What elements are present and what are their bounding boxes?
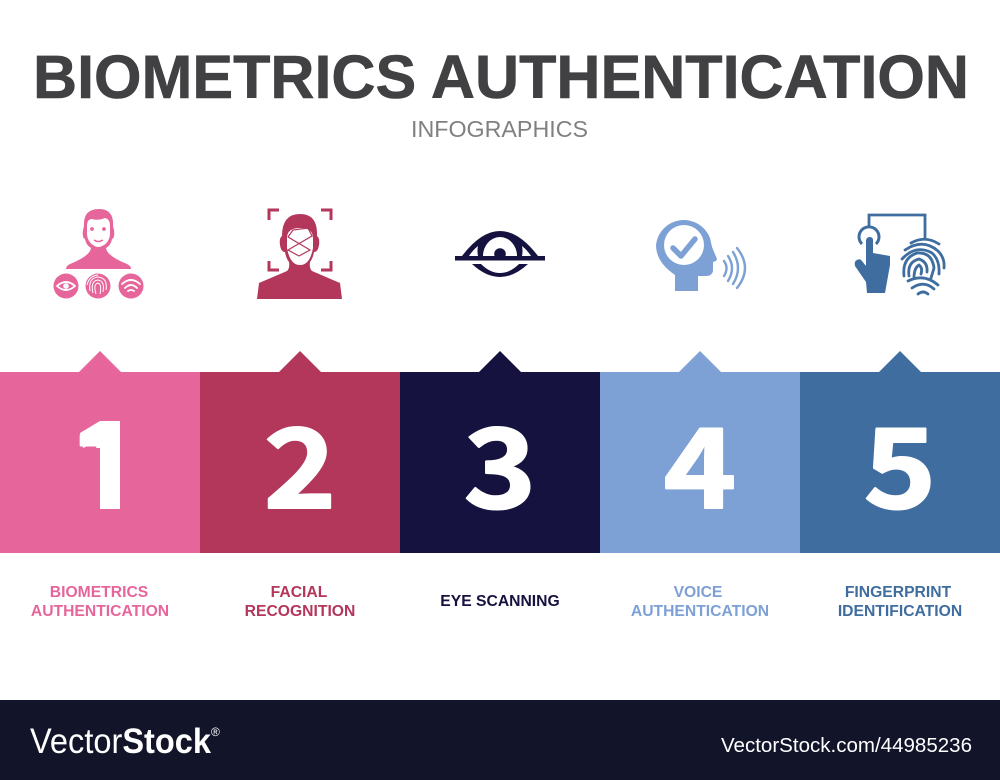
step 1 panel xyxy=(0,351,200,553)
step 2 panel: 2 xyxy=(264,381,336,540)
label 2: RECOGNITION xyxy=(245,603,355,620)
subtitle: INFOGRAPHICS xyxy=(411,116,588,142)
footer bar xyxy=(0,700,1000,780)
step 2 panel xyxy=(200,351,400,553)
icon: biometrics person xyxy=(54,209,144,298)
label 2: FACIAL xyxy=(271,584,328,601)
icon: facial recognition xyxy=(257,210,342,299)
icon: voice authentication xyxy=(656,220,745,291)
label 4: VOICE xyxy=(674,584,722,601)
step 5 panel xyxy=(800,351,1000,553)
title: BIOMETRICS AUTHENTICATION xyxy=(33,43,969,111)
step 4 panel xyxy=(600,351,800,553)
step 3 panel: 3 xyxy=(464,381,536,540)
label 4: AUTHENTICATION xyxy=(631,603,769,620)
label 5: IDENTIFICATION xyxy=(838,603,962,620)
step 1 panel: 1 xyxy=(68,381,140,540)
label 3: EYE SCANNING xyxy=(440,593,560,610)
step 3 panel xyxy=(400,351,600,553)
label 5: FINGERPRINT xyxy=(845,584,952,601)
footer logo: VectorStock xyxy=(30,722,211,761)
icon: eye scanning xyxy=(455,231,545,277)
footer url: VectorStock.com/44985236 xyxy=(721,735,972,757)
step 5 panel: 5 xyxy=(864,381,936,540)
step 4 panel: 4 xyxy=(664,381,736,540)
icon: fingerprint identification xyxy=(855,215,944,294)
footer registered mark: ® xyxy=(211,725,220,739)
label 1: AUTHENTICATION xyxy=(31,603,169,620)
label 1: BIOMETRICS xyxy=(50,584,148,601)
